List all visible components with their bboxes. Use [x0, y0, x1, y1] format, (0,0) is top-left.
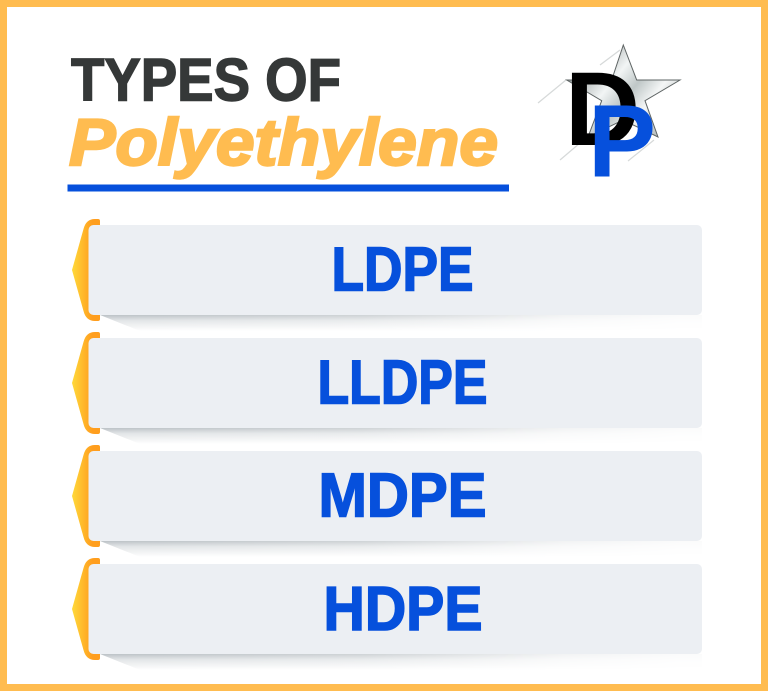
panel label: HDPE [324, 575, 482, 644]
orange tab [72, 332, 100, 434]
panel: MDPE [72, 445, 702, 557]
panel: LDPE [72, 219, 702, 331]
panel box [88, 564, 702, 654]
orange tab [72, 445, 100, 547]
panel shadow [100, 315, 626, 328]
logo: DP star [538, 45, 680, 198]
panel shadow [100, 541, 626, 554]
title [68, 46, 509, 192]
title underline [68, 184, 509, 192]
panel label: LLDPE [318, 348, 488, 417]
heading line: TYPES OF: TYPES OF [71, 46, 341, 114]
panel box [88, 338, 702, 428]
panel label: MDPE [318, 461, 486, 530]
orange tab [72, 219, 100, 321]
panel: HDPE [72, 558, 702, 670]
logo star [567, 45, 680, 137]
logo streaks [538, 50, 654, 161]
logo letter D: D [565, 51, 640, 168]
logo letter P: P [588, 84, 656, 198]
panel box [88, 225, 702, 315]
heading line: Polyethylene: Polyethylene [69, 105, 498, 179]
panel: LLDPE [72, 332, 702, 444]
orange tab [72, 558, 100, 660]
panel shadow [100, 428, 626, 441]
panel shadow [100, 654, 626, 667]
panel label: LDPE [332, 235, 474, 304]
panel box [88, 451, 702, 541]
